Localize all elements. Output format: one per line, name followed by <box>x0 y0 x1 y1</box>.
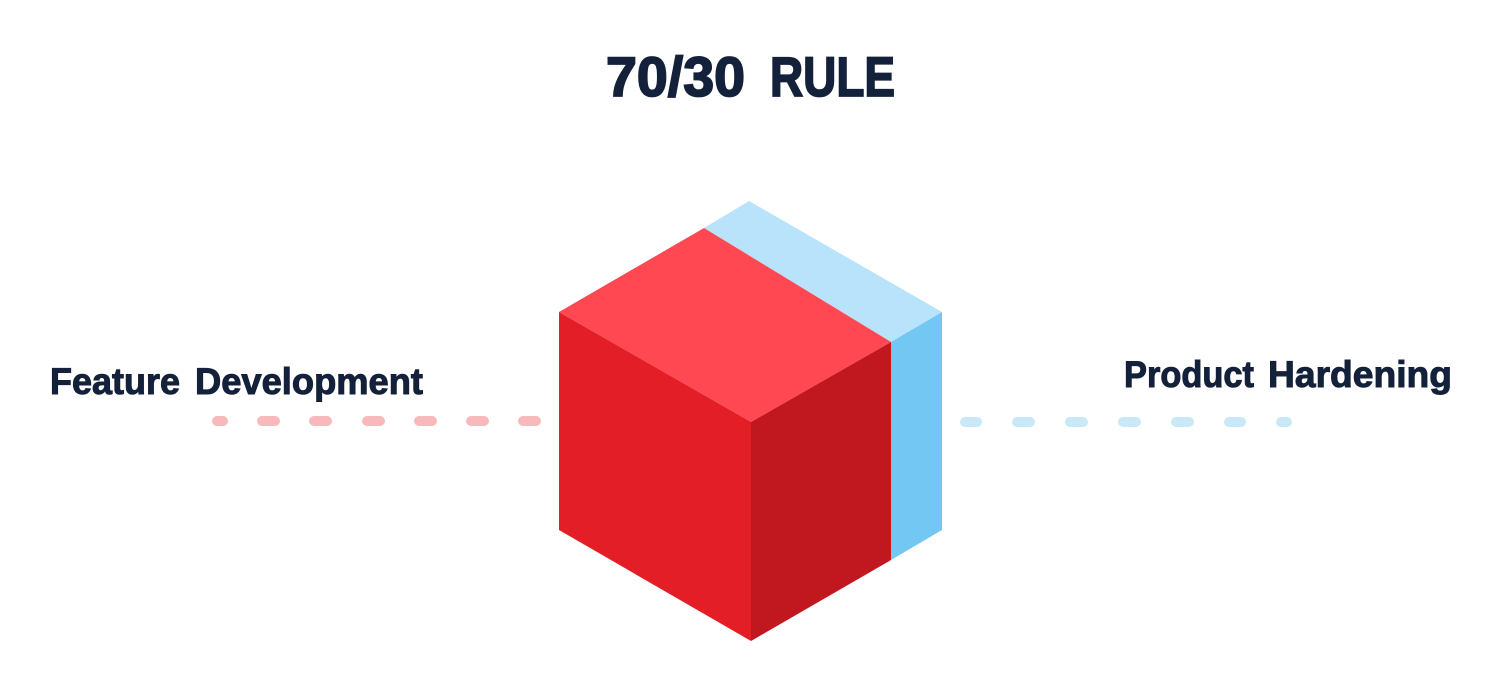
title: RULE <box>770 45 895 108</box>
cube top: blue section <box>704 201 942 342</box>
cube right: blue section <box>891 312 942 560</box>
label: Product Hardening: Hardening <box>1268 354 1452 395</box>
cube left: red face <box>559 312 751 641</box>
cube right: dark red face <box>751 342 891 641</box>
label: Product Hardening: Product <box>1124 354 1254 395</box>
label: Feature Development: Development <box>195 361 423 402</box>
cube <box>559 201 942 641</box>
dashed connector: blue <box>960 417 1292 427</box>
label: Feature Development: Feature <box>50 361 180 402</box>
dashed connector: red <box>212 416 541 426</box>
title: 70/30 <box>606 45 745 108</box>
cube top: red section <box>559 228 891 422</box>
